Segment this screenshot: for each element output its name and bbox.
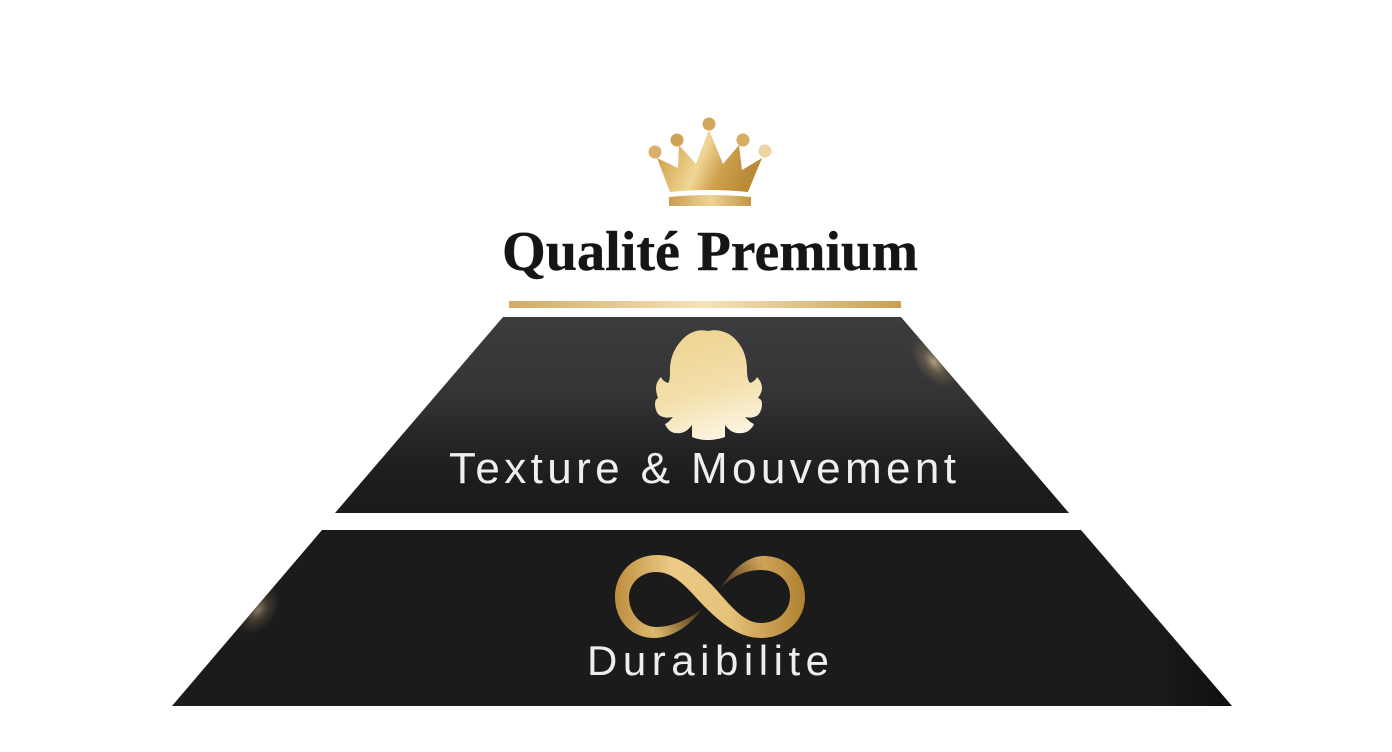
icon: hair silhouette: [655, 330, 762, 440]
label: durabilité: Duraibilite: [587, 637, 829, 684]
title: Premium: [697, 221, 918, 283]
title: [502, 221, 918, 283]
icon: gold infinity: [615, 555, 805, 638]
icon: gold crown: [648, 118, 772, 206]
gold divider bar: [509, 301, 901, 308]
panel: bottom tier: [172, 530, 1232, 706]
panel: middle tier: [335, 317, 1069, 513]
title: Qualité: [502, 221, 680, 283]
label: texture et mouvement: Texture & Mouvement: [449, 444, 956, 493]
